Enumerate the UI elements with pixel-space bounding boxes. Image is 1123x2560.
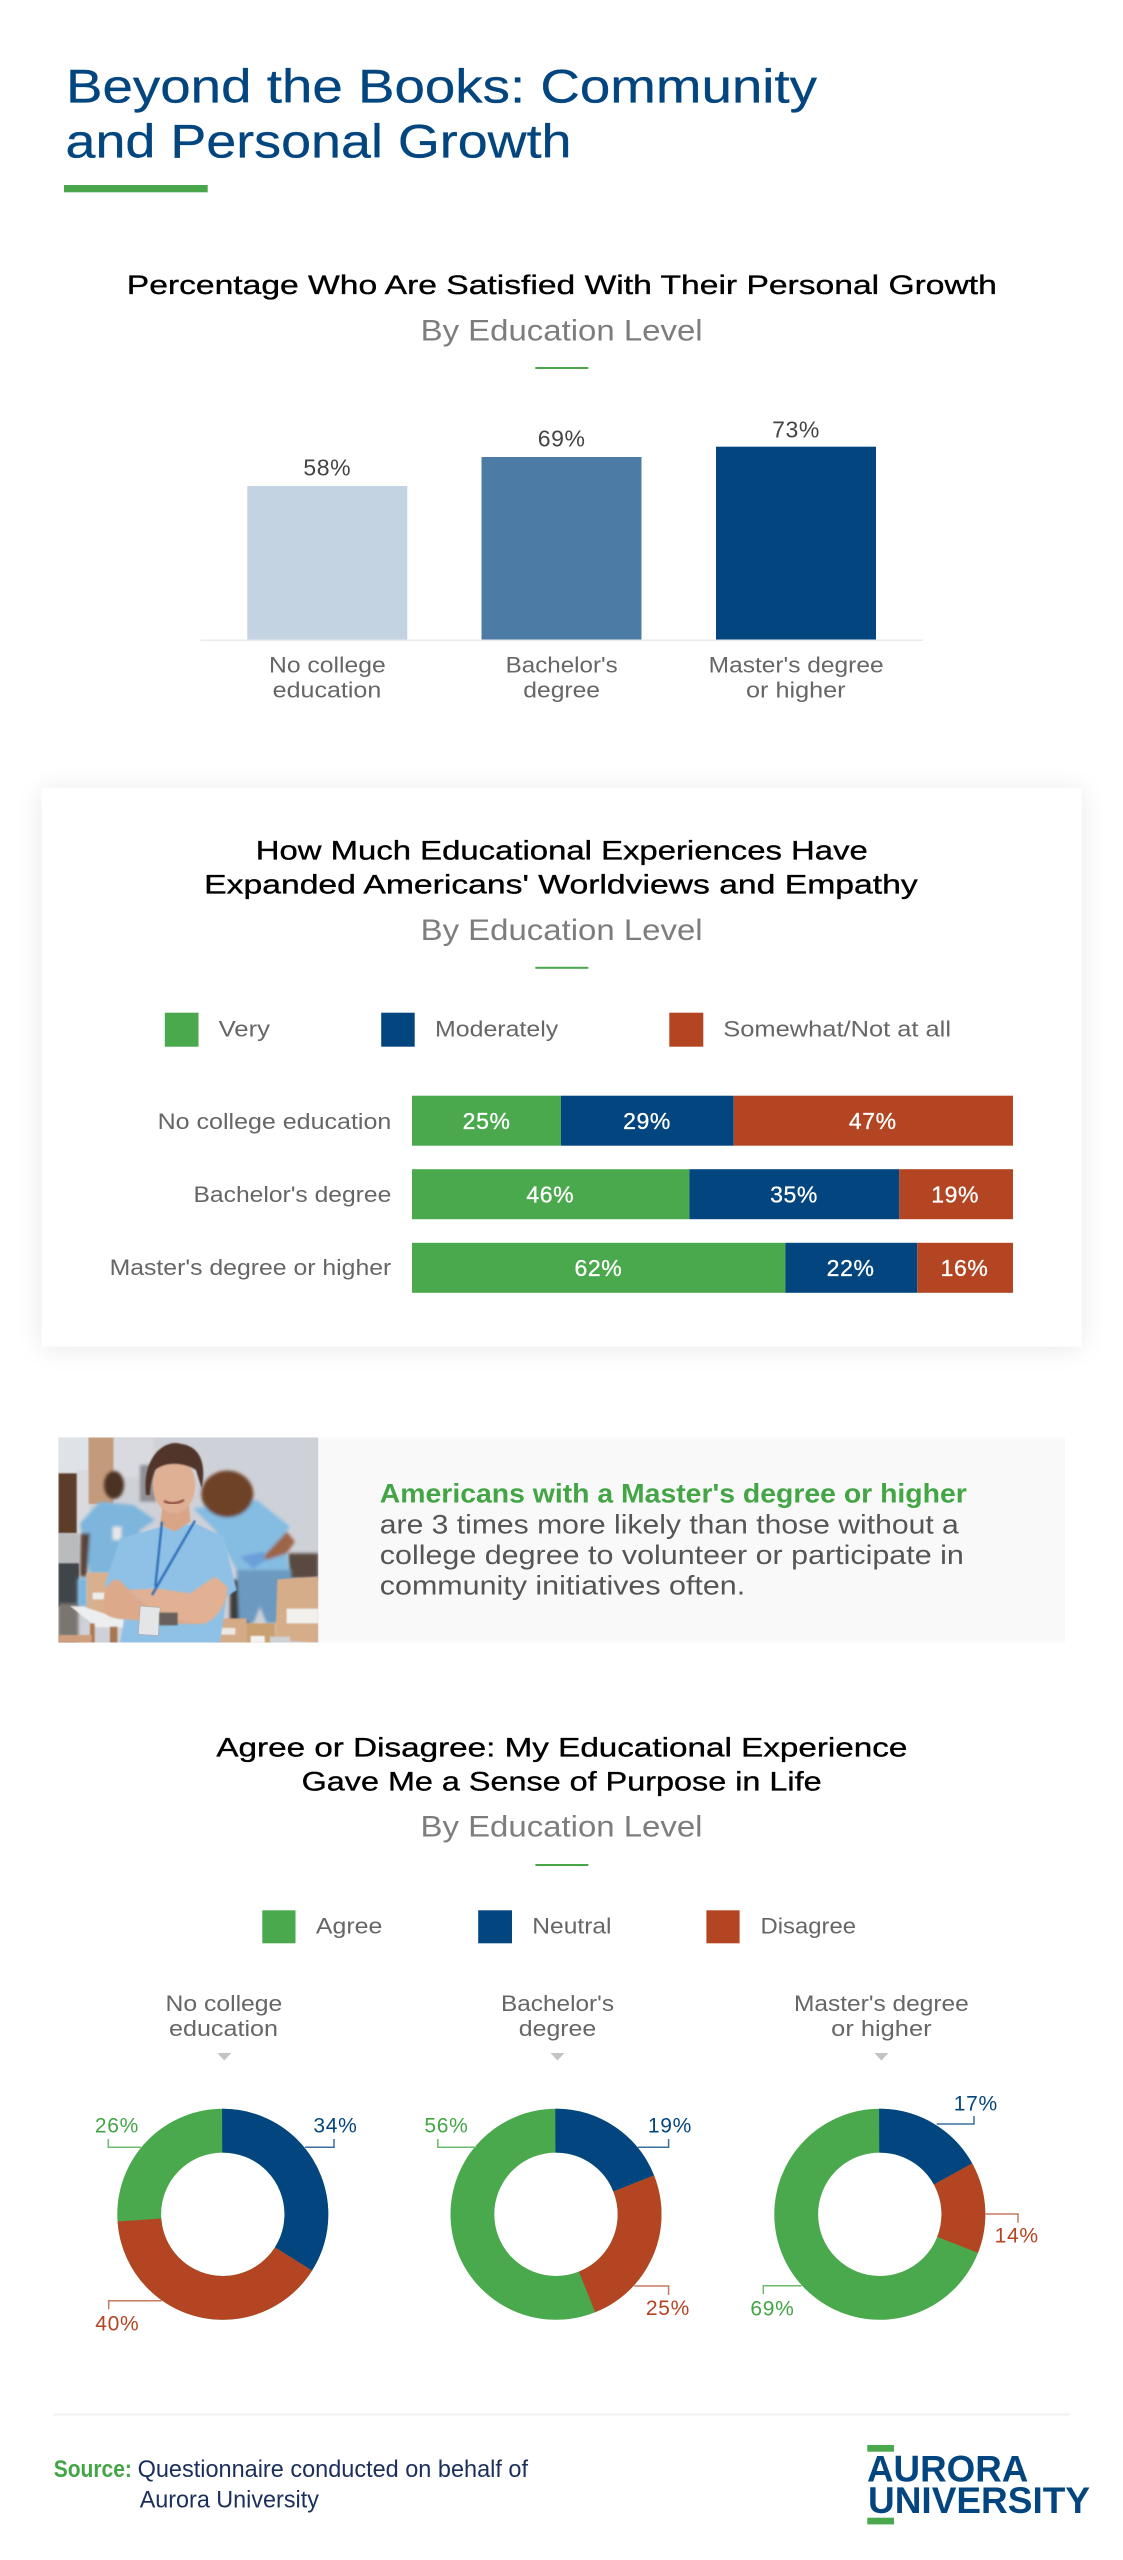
row: no college: 25% <box>463 1108 511 1134</box>
bar axis labels: Master's degree <box>709 653 884 678</box>
donut: bachelor's <box>424 1991 692 2320</box>
photo: volunteers <box>58 1437 318 1643</box>
donut: no college: 34% <box>313 2115 358 2138</box>
bar axis labels: or higher <box>746 678 846 703</box>
bar chart <box>201 416 923 703</box>
donut: bachelor's: Bachelor's <box>501 1991 614 2016</box>
row: master's <box>110 1243 1013 1293</box>
bar: master's: 73% <box>772 416 820 442</box>
legend: Moderately <box>435 1017 558 1042</box>
row: master's: Master's degree or higher <box>110 1255 391 1280</box>
donut: no college: education <box>169 2016 278 2041</box>
legend: Very <box>219 1017 270 1042</box>
bar: bachelor's: 69% <box>538 426 586 452</box>
donut: master's: 17% <box>954 2093 998 2116</box>
row: bachelor's <box>194 1169 1013 1219</box>
donut: no college <box>95 1991 358 2336</box>
donut: no college: 40% <box>95 2313 139 2336</box>
heading: purpose: Agree or Disagree: My Educational Experience <box>216 1733 907 1763</box>
bar: bachelor's <box>482 426 642 640</box>
panel: personal growth satisfaction <box>127 270 997 703</box>
title: Beyond the Books: Community <box>66 61 817 114</box>
donut: bachelor's: degree <box>519 2016 596 2041</box>
legend <box>165 1013 951 1047</box>
donut: master's <box>750 1991 1039 2321</box>
woman in back <box>193 1471 295 1623</box>
stacked bar chart <box>110 1096 1013 1293</box>
heading: worldviews: How Much Educational Experiences Have <box>256 836 868 866</box>
callout text: Americans with a Master's degree or higher <box>380 1479 967 1509</box>
legend: Disagree <box>760 1914 856 1939</box>
legend: Somewhat/Not at all <box>723 1017 951 1042</box>
bar axis labels: No college <box>269 653 386 678</box>
logo: Aurora University: AURORA <box>867 2448 1028 2490</box>
title <box>66 61 817 169</box>
donut: no college: No college <box>166 1991 282 2016</box>
row: bachelor's: Bachelor's degree <box>194 1182 391 1207</box>
row: no college: No college education <box>158 1109 391 1134</box>
logo: Aurora University <box>867 2445 1090 2524</box>
main woman <box>103 1443 237 1643</box>
row: bachelor's: 35% <box>770 1182 818 1208</box>
donut: master's: 14% <box>995 2225 1039 2248</box>
source note: Aurora University <box>140 2486 319 2514</box>
title accent bar <box>64 185 208 192</box>
callout text: are 3 times more likely than those without a <box>380 1509 960 1539</box>
donut: master's: 69% <box>750 2298 795 2321</box>
panel: worldviews and empathy card <box>42 788 1082 1348</box>
donut: bachelor's: 19% <box>648 2115 692 2138</box>
bar: no college <box>247 455 407 640</box>
heading: worldviews: Expanded Americans' Worldviews and Empathy <box>204 869 918 899</box>
heading: worldviews <box>204 836 918 899</box>
bar axis labels: degree <box>523 678 600 703</box>
row: bachelor's: 46% <box>526 1182 574 1208</box>
row: no college: 47% <box>849 1108 897 1134</box>
legend: Agree <box>316 1914 382 1939</box>
legend <box>262 1910 856 1943</box>
logo: Aurora University: UNIVERSITY <box>868 2479 1090 2521</box>
legend: Neutral <box>532 1914 612 1939</box>
boxes and table <box>58 1573 318 1643</box>
donut: no college: 26% <box>95 2115 139 2138</box>
heading: purpose <box>216 1733 907 1797</box>
man <box>77 1471 155 1607</box>
bar: master's <box>716 416 876 640</box>
callout text <box>380 1479 967 1600</box>
row: master's: 62% <box>574 1255 622 1281</box>
row: bachelor's: 19% <box>931 1182 979 1208</box>
source note: Questionnaire conducted on behalf of <box>138 2456 528 2483</box>
source note <box>54 2456 528 2514</box>
bar axis labels: education <box>273 678 381 703</box>
heading: personal growth: Percentage Who Are Satisfied With Their Personal Growth <box>127 270 997 300</box>
row: master's: 16% <box>941 1255 988 1281</box>
subheading: By Education Level <box>421 914 703 947</box>
title: and Personal Growth <box>66 116 572 169</box>
subheading: By Education Level <box>421 314 703 348</box>
row: no college: 29% <box>623 1108 671 1134</box>
bar: no college: 58% <box>303 455 351 481</box>
callout: volunteering <box>58 1437 1065 1643</box>
donut: master's: Master's degree <box>794 1991 969 2016</box>
donut: bachelor's: 56% <box>424 2115 468 2138</box>
callout text: community initiatives often. <box>380 1570 745 1600</box>
bar axis labels: Bachelor's <box>506 653 618 678</box>
source note: Source: <box>54 2456 132 2483</box>
panel: sense of purpose <box>95 1733 1039 2336</box>
row: no college <box>158 1096 1013 1146</box>
donut: master's: or higher <box>831 2016 932 2041</box>
bar axis labels <box>269 653 884 703</box>
row: master's: 22% <box>827 1255 875 1281</box>
subheading: By Education Level <box>420 1811 702 1844</box>
heading: purpose: Gave Me a Sense of Purpose in Life <box>302 1767 822 1797</box>
callout text: college degree to volunteer or participate in <box>380 1540 964 1570</box>
donut: bachelor's: 25% <box>646 2297 690 2320</box>
